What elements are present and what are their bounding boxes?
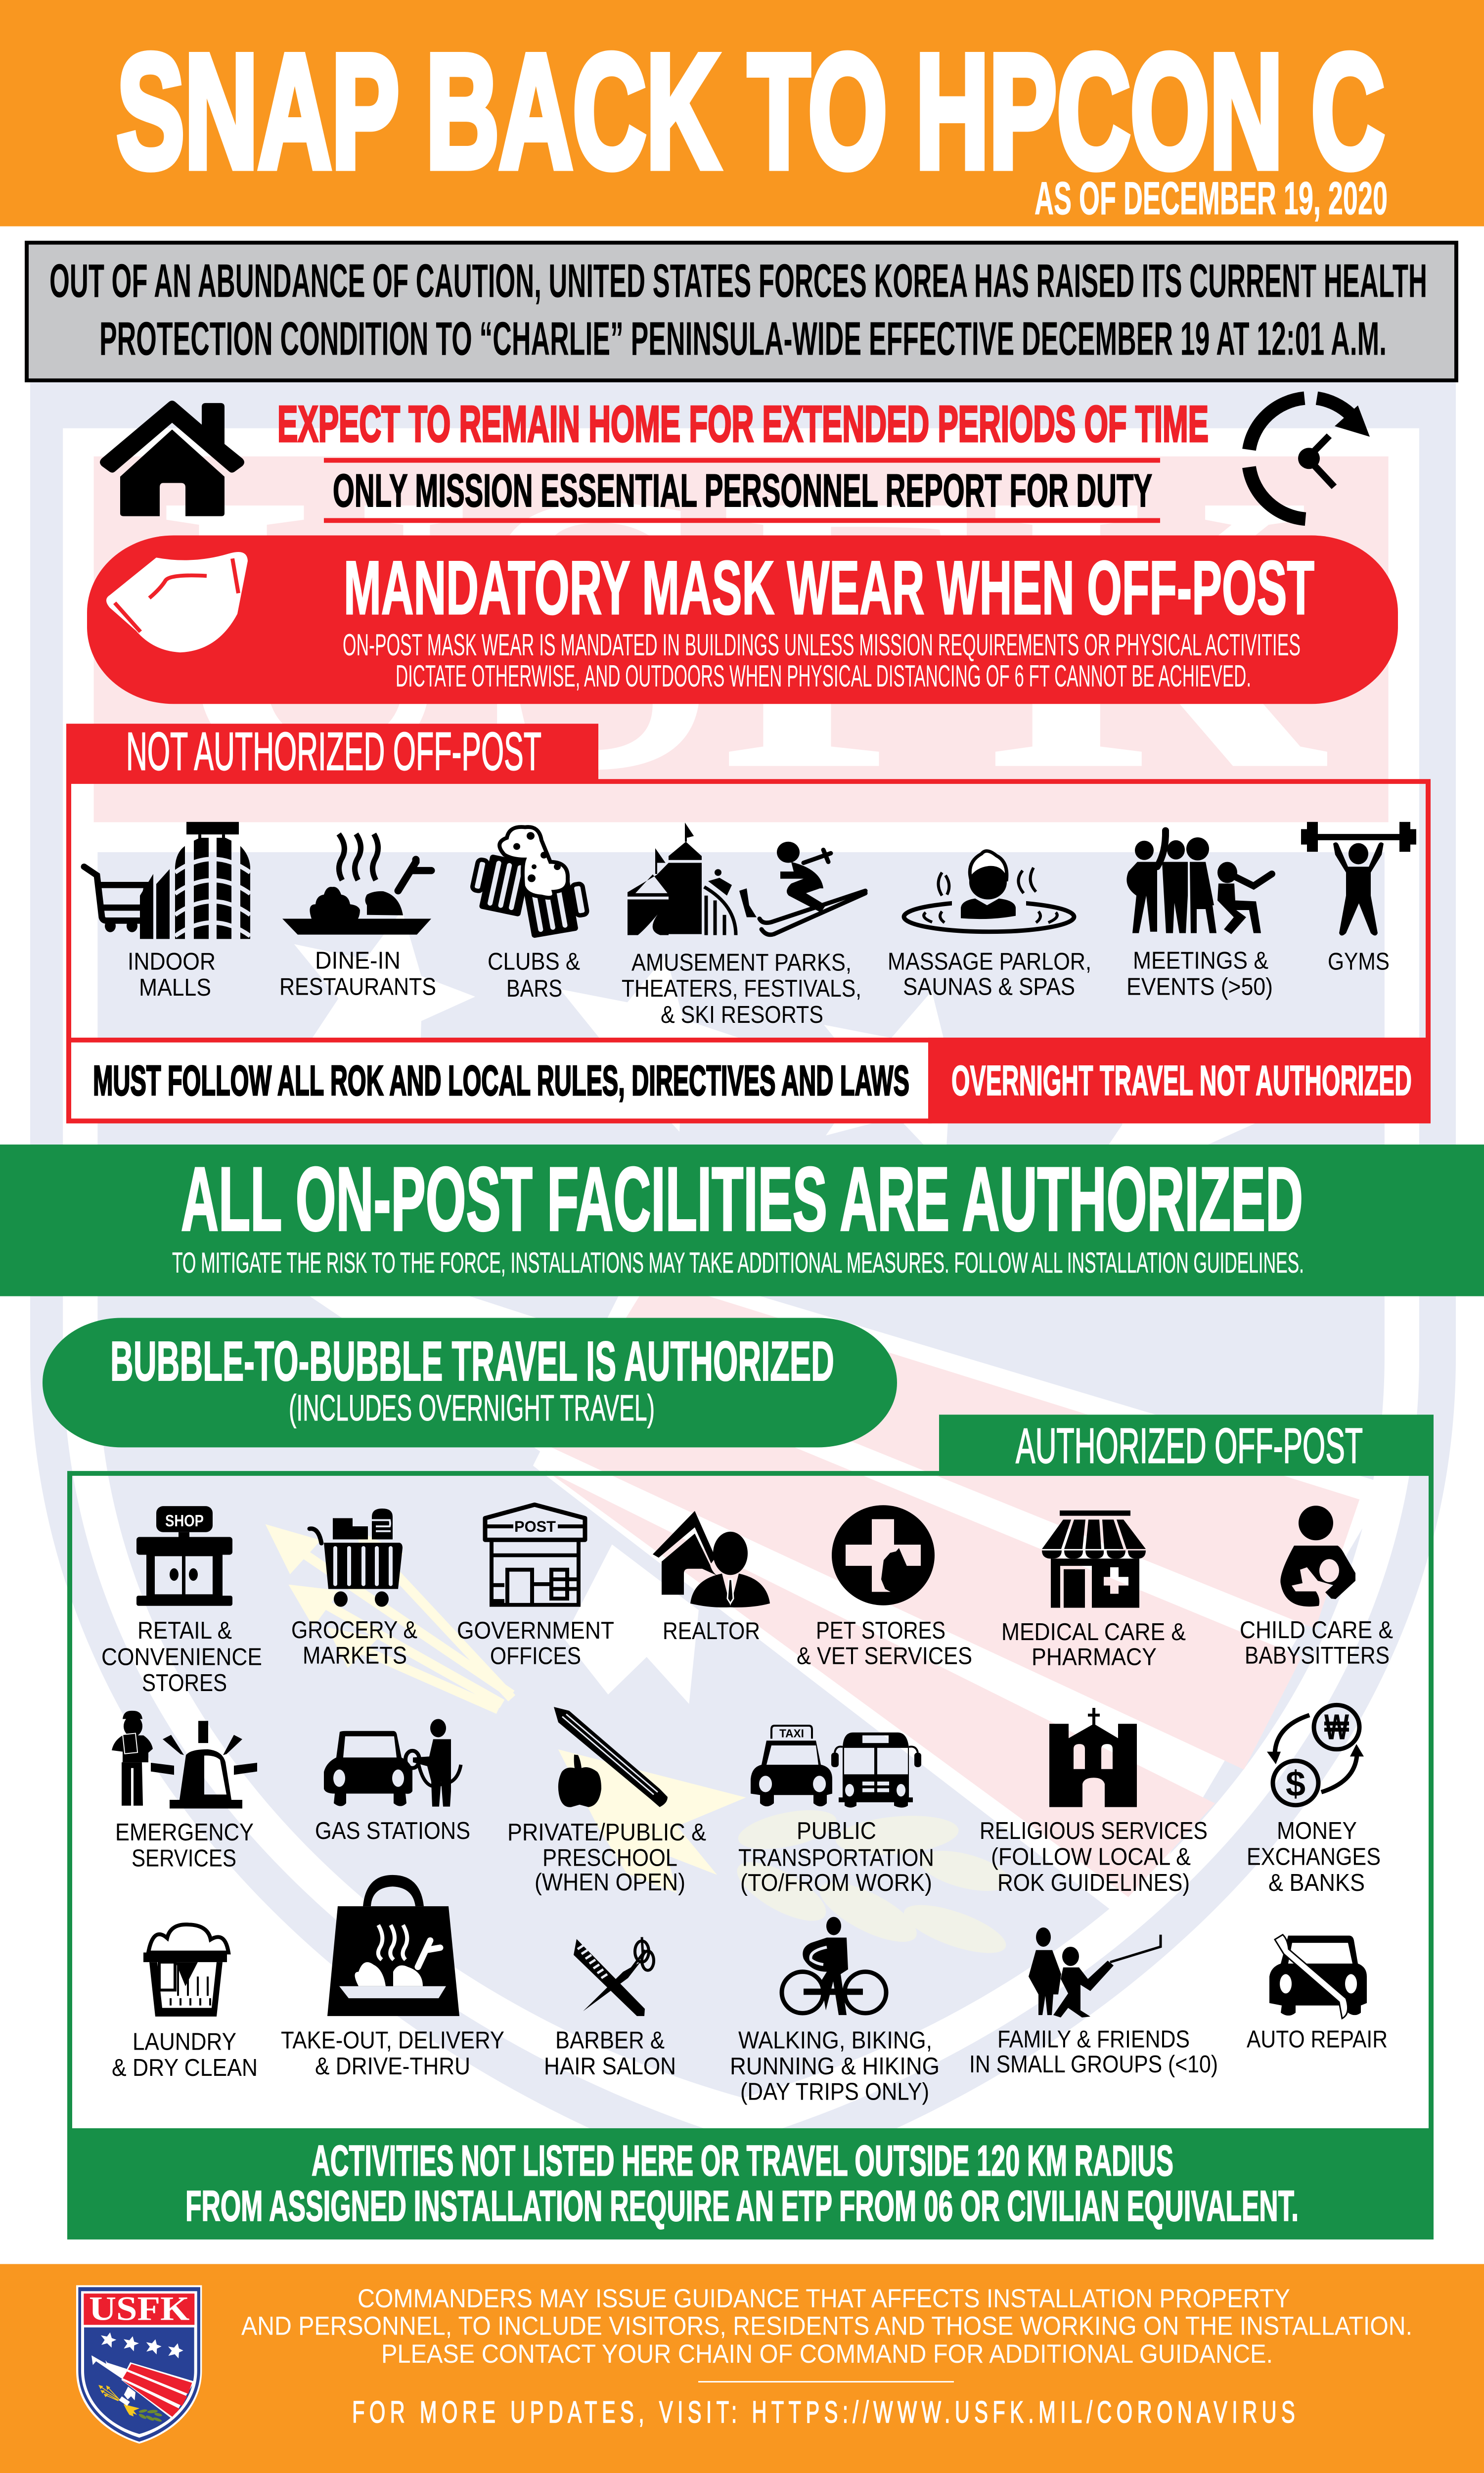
- icon: private, public and preschool: [554, 1707, 668, 1807]
- icon: pet stores and vet services: [832, 1505, 935, 1605]
- footer: [0, 2264, 1484, 2473]
- commander guidance text: PLEASE CONTACT YOUR CHAIN OF COMMAND FOR ADDITIONAL GUIDANCE.: [381, 2340, 1273, 2369]
- pill: bubble-to-bubble travel: BUBBLE-TO-BUBBLE TRAVEL IS AUTHORIZED: [110, 1330, 834, 1393]
- icon: government offices: [485, 1505, 585, 1605]
- not authorized labels: DINE-IN: [315, 947, 401, 974]
- labels row one: CONVENIENCE: [101, 1644, 262, 1670]
- icon: realtor: [653, 1511, 770, 1607]
- labels row two: EMERGENCY: [115, 1819, 254, 1846]
- not authorized labels: MEETINGS &: [1133, 947, 1268, 974]
- icon: family and friends in small groups: [1029, 1927, 1161, 2017]
- labels row three: & DRY CLEAN: [112, 2054, 258, 2081]
- icon: gyms: [1301, 822, 1416, 936]
- labels row three: IN SMALL GROUPS (<10): [969, 2051, 1218, 2078]
- labels row one: REALTOR: [663, 1617, 760, 1645]
- labels row three: BARBER &: [555, 2027, 665, 2054]
- icon: take-out, delivery and drive-thru: [327, 1875, 459, 2016]
- background watermark: pale USFK shield: USFK: [155, 412, 1332, 852]
- labels row three: TAKE-OUT, DELIVERY: [281, 2027, 504, 2054]
- labels row two: (TO/FROM WORK): [740, 1870, 932, 1896]
- icon: clock: [1249, 398, 1370, 519]
- labels row two: & BANKS: [1268, 1870, 1365, 1896]
- icon: dine-in restaurants: [282, 834, 431, 935]
- stay home message: [277, 396, 1209, 523]
- labels row one: STORES: [142, 1670, 227, 1696]
- labels row two: ROK GUIDELINES): [997, 1870, 1190, 1896]
- labels row one: MEDICAL CARE &: [1001, 1618, 1186, 1646]
- logo: USFK shield: [76, 2285, 202, 2444]
- icon: auto repair: [1269, 1935, 1367, 2018]
- labels row one: OFFICES: [490, 1643, 581, 1669]
- labels row one: GROCERY &: [291, 1617, 417, 1644]
- labels row two: [115, 1817, 1381, 1896]
- not authorized labels: SAUNAS & SPAS: [903, 973, 1075, 1000]
- pill: bubble-to-bubble travel: [43, 1318, 897, 1447]
- icon: face mask: [106, 552, 248, 652]
- not authorized labels: CLUBS &: [488, 948, 580, 975]
- not authorized labels: THEATERS, FESTIVALS,: [622, 975, 861, 1002]
- labels row three: WALKING, BIKING,: [738, 2027, 932, 2054]
- labels row two: MONEY: [1277, 1817, 1357, 1844]
- icon: retail and convenience stores: SHOP: [165, 1512, 204, 1530]
- labels row two: TRANSPORTATION: [738, 1844, 934, 1871]
- not authorized labels: EVENTS (>50): [1126, 973, 1273, 1000]
- notice text: [49, 255, 1427, 365]
- labels row one: & VET SERVICES: [797, 1643, 972, 1669]
- commander guidance text: [241, 2285, 1412, 2369]
- labels row one: BABYSITTERS: [1245, 1642, 1390, 1669]
- not authorized labels: & SKI RESORTS: [661, 1001, 823, 1028]
- band: on-post facilities: [0, 1145, 1484, 1296]
- icon: walking, biking, running and hiking: [782, 1917, 886, 2015]
- labels row three: LAUNDRY: [133, 2028, 236, 2055]
- labels row two: PUBLIC: [797, 1817, 876, 1844]
- labels row three: & DRIVE-THRU: [315, 2053, 470, 2080]
- labels row one: PHARMACY: [1032, 1644, 1157, 1670]
- labels row two: EXCHANGES: [1247, 1843, 1381, 1870]
- panel: authorized off-post: [67, 1415, 1434, 2240]
- labels row two: GAS STATIONS: [315, 1817, 470, 1844]
- icon: meetings and events: [1126, 830, 1272, 934]
- pill: bubble-to-bubble travel: (INCLUDES OVERNIGHT TRAVEL): [289, 1387, 655, 1428]
- labels row one: RETAIL &: [137, 1617, 232, 1644]
- not authorized labels: [128, 947, 1390, 1028]
- icon: massage parlor, saunas and spas: [904, 851, 1074, 932]
- icon: clubs and bars: [468, 827, 590, 938]
- labels row three: AUTO REPAIR: [1247, 2026, 1388, 2053]
- icon: medical care and pharmacy: [1042, 1511, 1146, 1608]
- icon: religious services: [1049, 1708, 1137, 1807]
- icon: amusement parks and ski resorts: [628, 826, 865, 935]
- icon: money exchanges and banks: $: [1286, 1764, 1305, 1804]
- not authorized labels: RESTAURANTS: [279, 973, 436, 1000]
- logo: USFK shield: USFK: [89, 2290, 189, 2328]
- icon: laundry and dry clean: [143, 1924, 228, 2016]
- labels row two: PRIVATE/PUBLIC &: [507, 1819, 706, 1846]
- not authorized labels: MASSAGE PARLOR,: [888, 948, 1091, 975]
- not authorized labels: GYMS: [1328, 948, 1390, 975]
- footer row of not authorized panel: [66, 1038, 1431, 1123]
- icon: retail and convenience stores: [136, 1506, 232, 1606]
- labels row three: [112, 2026, 1388, 2105]
- not authorized labels: MALLS: [139, 974, 211, 1001]
- not authorized labels: INDOOR: [128, 948, 216, 975]
- labels row two: (FOLLOW LOCAL &: [991, 1843, 1191, 1870]
- icon: public transportation: TAXI: [779, 1728, 804, 1740]
- panel: mandatory mask: [87, 536, 1398, 704]
- icon: indoor malls: [84, 822, 250, 939]
- labels row two: PRESCHOOL: [542, 1844, 677, 1871]
- labels row three: (DAY TRIPS ONLY): [740, 2078, 929, 2105]
- icon: house: [100, 401, 244, 516]
- icon: money exchanges and banks: [1267, 1705, 1364, 1805]
- labels row one: [101, 1617, 1393, 1696]
- labels row three: RUNNING & HIKING: [730, 2053, 940, 2080]
- background watermark: pale USFK shield: [30, 381, 1456, 2188]
- icon: gas stations: [324, 1719, 461, 1807]
- tab heading: [66, 722, 598, 782]
- icon: government offices: POST: [514, 1517, 556, 1535]
- mask detail text: [343, 628, 1301, 693]
- not authorized labels: BARS: [506, 975, 562, 1002]
- icon: public transportation: [751, 1726, 921, 1808]
- notice box: [27, 243, 1456, 380]
- labels row three: FAMILY & FRIENDS: [997, 2026, 1190, 2053]
- not authorized labels: AMUSEMENT PARKS,: [631, 949, 852, 976]
- labels row one: GOVERNMENT: [457, 1617, 614, 1644]
- labels row one: PET STORES: [816, 1617, 945, 1644]
- icon: emergency services: [112, 1711, 257, 1809]
- labels row three: HAIR SALON: [544, 2053, 676, 2080]
- ETP requirement band: [67, 2128, 1434, 2240]
- labels row two: RELIGIOUS SERVICES: [980, 1817, 1208, 1844]
- commander guidance text: COMMANDERS MAY ISSUE GUIDANCE THAT AFFECTS INSTALLATION PROPERTY: [358, 2285, 1290, 2313]
- icon: money exchanges and banks: ₩: [1324, 1707, 1349, 1747]
- labels row two: (WHEN OPEN): [535, 1869, 685, 1896]
- labels row one: CHILD CARE &: [1240, 1617, 1393, 1644]
- icon: grocery and markets: [310, 1509, 403, 1607]
- tab heading: NOT AUTHORIZED OFF-POST: [126, 722, 541, 781]
- labels row one: MARKETS: [303, 1642, 407, 1669]
- icon: barber and hair salon: [574, 1937, 654, 2016]
- header band: [0, 0, 1484, 227]
- panel: not authorized off-post: [66, 722, 1431, 1123]
- icon: child care and babysitters: [1280, 1506, 1355, 1606]
- labels row two: SERVICES: [132, 1845, 236, 1872]
